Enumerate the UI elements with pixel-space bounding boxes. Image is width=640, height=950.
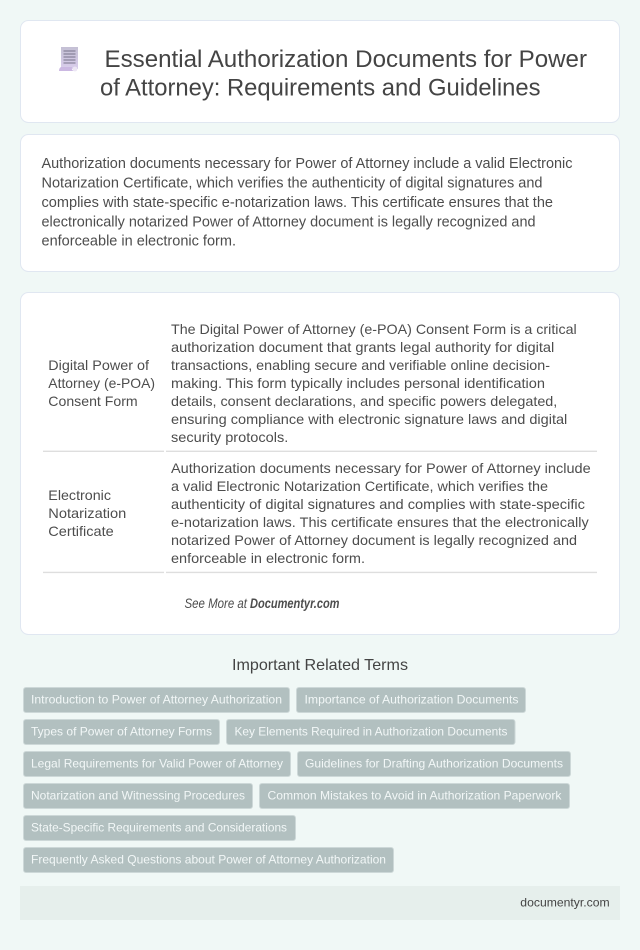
row label: Digital Power of Attorney: Attorney (e-POA) <box>48 375 155 391</box>
row text: Electronic Notarization Certificate <box>171 460 591 566</box>
footer: documentyr.com <box>520 896 610 910</box>
row text: Digital Power of Attorney: ensuring compliance with electronic signature laws and digital <box>171 411 567 427</box>
panel: documents table <box>20 292 620 634</box>
tag: Types of Power of Attorney Forms <box>31 724 212 738</box>
icon: document scroll <box>59 47 78 71</box>
footer <box>20 886 620 920</box>
tag <box>226 720 515 744</box>
tag <box>24 848 394 872</box>
summary paragraph <box>42 156 572 250</box>
row label: Digital Power of Attorney <box>48 357 155 409</box>
summary paragraph: complies with state-specific e-notarization laws. This certificate ensures that the <box>42 195 553 211</box>
heading: related terms: Important Related Terms <box>232 657 408 674</box>
row text: Digital Power of Attorney <box>171 321 577 445</box>
panel: title card <box>20 20 620 122</box>
heading <box>100 46 587 102</box>
row text: Electronic Notarization Certificate: notarized Power of Attorney document is legally recognized and <box>171 532 577 548</box>
row label: Electronic Notarization Certificate: Electronic <box>48 487 111 503</box>
tag: Guidelines for Drafting Authorization Documents <box>305 756 563 770</box>
row text: Digital Power of Attorney: The Digital Power of Attorney (e-POA) Consent Form is a critical <box>171 321 577 337</box>
heading: Essential Authorization Documents for Power <box>104 46 587 73</box>
row label: Electronic Notarization Certificate <box>48 487 126 539</box>
panel: summary card <box>20 134 620 272</box>
see more link <box>184 595 340 611</box>
row text: Electronic Notarization Certificate: enforceable in electronic form. <box>171 550 365 566</box>
tag <box>296 688 526 712</box>
related terms tags <box>24 688 570 872</box>
summary paragraph: Authorization documents necessary for Power of Attorney include a valid Electronic <box>42 156 572 172</box>
tag: Legal Requirements for Valid Power of Attorney <box>31 756 283 770</box>
tag: Importance of Authorization Documents <box>304 692 518 706</box>
heading: of Attorney: Requirements and Guidelines <box>100 74 540 102</box>
tag <box>24 784 252 808</box>
tag <box>24 688 290 712</box>
summary paragraph: electronically notarized Power of Attorney document is legally recognized and <box>42 214 536 230</box>
tag <box>24 752 290 776</box>
tag <box>24 720 220 744</box>
row label: Electronic Notarization Certificate: Notarization <box>48 505 126 521</box>
summary paragraph: Notarization Certificate, which verifies the authenticity of digital signatures and <box>42 176 542 192</box>
tag: Notarization and Witnessing Procedures <box>31 788 245 802</box>
row text: Digital Power of Attorney: authorization document that grants legal authority for digital <box>171 339 554 355</box>
tag: Common Mistakes to Avoid in Authorization Paperwork <box>268 788 562 802</box>
see more link: See More at <box>184 595 248 611</box>
row text: Electronic Notarization Certificate: authenticity of digital signatures and complies with state-specific <box>171 496 585 512</box>
row label: Digital Power of Attorney: Consent Form <box>48 393 138 409</box>
tag: Introduction to Power of Attorney Authorization <box>31 692 282 706</box>
see more link: Documentyr.com <box>250 595 340 611</box>
tag <box>260 784 570 808</box>
row text: Digital Power of Attorney: details, consent declarations, and specific powers delegated, <box>171 393 557 409</box>
row label: Digital Power of Attorney: Digital Power of <box>48 357 149 373</box>
row label: Electronic Notarization Certificate: Certificate <box>48 523 114 539</box>
tag: Key Elements Required in Authorization Documents <box>234 724 508 738</box>
tag: Frequently Asked Questions about Power of Attorney Authorization <box>31 852 386 866</box>
row text: Digital Power of Attorney: making. This form typically includes personal identification <box>171 375 545 391</box>
tag <box>298 752 570 776</box>
summary paragraph: enforceable in electronic form. <box>42 234 236 250</box>
row text: Digital Power of Attorney: security protocols. <box>171 429 288 445</box>
row text: Electronic Notarization Certificate: a valid Electronic Notarization Certificate, which verifies the <box>171 478 548 494</box>
tag <box>24 816 296 840</box>
tag: State-Specific Requirements and Considerations <box>31 820 287 834</box>
row text: Electronic Notarization Certificate: e-notarization laws. This certificate ensures that the electronically <box>171 514 589 530</box>
row text: Electronic Notarization Certificate: Authorization documents necessary for Power of Attorney include <box>171 460 591 476</box>
row text: Digital Power of Attorney: transactions, enabling secure and verifiable online decision- <box>171 357 550 373</box>
